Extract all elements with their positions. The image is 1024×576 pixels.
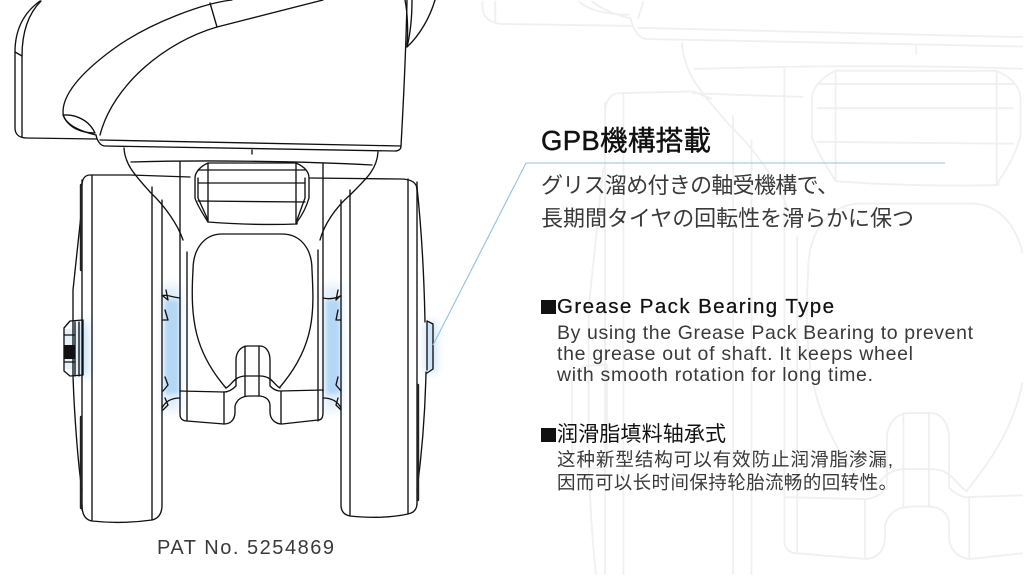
Chinese heading: 润滑脂填料轴承式 xyxy=(557,423,726,446)
English body: with smooth rotation for long time. xyxy=(556,364,873,386)
English body xyxy=(556,322,974,386)
leader line xyxy=(433,163,945,345)
Japanese description: グリス溜め付きの軸受機構で、 xyxy=(541,173,839,198)
Chinese section xyxy=(541,423,897,493)
Japanese description: 長期間タイヤの回転性を滑らかに保つ xyxy=(541,206,914,231)
English section xyxy=(541,295,974,386)
English body: By using the Grease Pack Bearing to prevent xyxy=(557,322,974,344)
English heading: Grease Pack Bearing Type xyxy=(557,295,834,318)
Chinese body: 因而可以长时间保持轮胎流畅的回转性。 xyxy=(557,472,897,493)
blue highlight: grease bearing glow xyxy=(65,285,436,410)
caster wheel line drawing xyxy=(15,0,435,522)
Chinese body xyxy=(557,449,897,493)
tread marks xyxy=(81,185,418,508)
English body: the grease out of shaft. It keeps wheel xyxy=(557,343,913,365)
Japanese description xyxy=(541,173,914,231)
watermark: enlarged caster line drawing xyxy=(482,2,1022,574)
bearing cap dark band xyxy=(64,345,75,359)
patent number: PAT No. 5254869 xyxy=(157,537,334,559)
Chinese body: 这种新型结构可以有效防止润滑脂渗漏, xyxy=(557,449,893,470)
heading: GPB: GPB機構搭載 xyxy=(541,125,711,156)
